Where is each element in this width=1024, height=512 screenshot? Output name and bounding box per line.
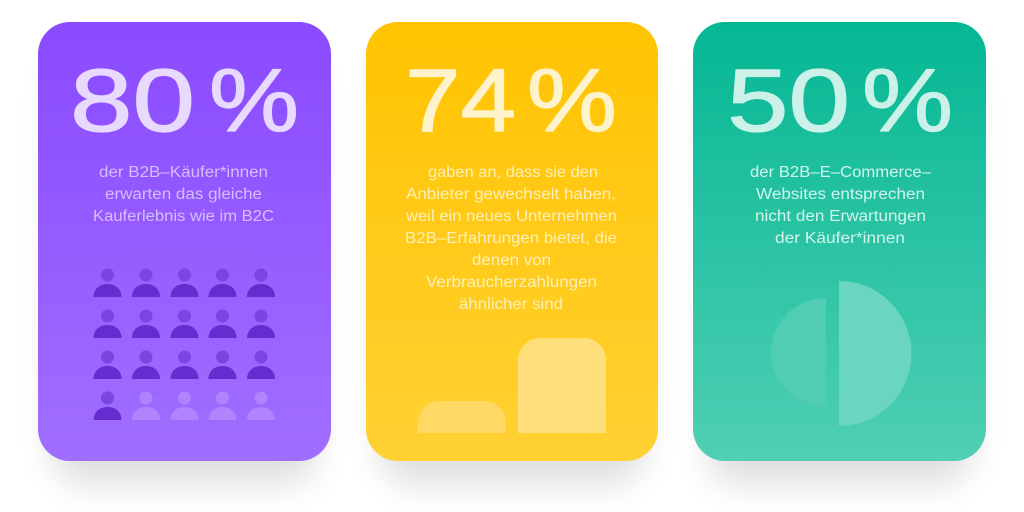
heading: 50 percent [727,50,953,150]
panel: purple card 80 percent [38,22,331,484]
icon grid: people 20 percent light [132,392,275,420]
heading: 50 percent: % [862,50,953,150]
text: yellow description: Verbraucherzahlungen [426,274,597,291]
text: yellow description: gaben an, dass sie den [428,164,598,181]
text: purple description: der B2B–Käufer*innen [99,164,268,181]
text: purple description: erwarten das gleiche [105,186,262,203]
text: green description: der Käufer*innen [775,230,905,247]
heading: 50 percent: 50 [727,50,850,150]
text: green description: Websites entsprechen [756,186,925,203]
heading: 74 percent: 74 [405,50,516,150]
text: green description: der B2B–E–Commerce– [750,164,931,181]
text: yellow description: Anbieter gewechselt haben, [406,186,616,203]
heading: 80 percent: % [209,50,299,150]
bar: small [418,401,506,433]
text: purple description: Kauferlebnis wie im B2C [93,208,274,225]
text: yellow description: weil ein neues Unternehmen [405,208,617,225]
text: yellow description: ähnlicher sind [459,296,563,313]
heading: 80 percent [70,50,299,150]
heading: 80 percent: 80 [70,50,195,150]
heading: 74 percent: % [527,50,617,150]
icon grid: people 80 percent dark [94,268,275,420]
bar chart: two bars [418,338,606,433]
chart: split half circles [771,281,912,426]
text: yellow description: denen von [472,252,551,269]
panel: yellow card 74 percent [366,22,658,484]
text: yellow description [405,164,617,313]
text: green description [750,164,931,247]
text: green description: nicht den Erwartungen [755,208,926,225]
text: purple description [93,164,274,225]
half circle: small left [771,298,826,406]
text: yellow description: B2B–Erfahrungen bietet, die [405,230,617,247]
bar: large [518,338,606,433]
half circle: large right [839,281,912,426]
panel: green card 50 percent [693,22,986,484]
heading: 74 percent [405,50,617,150]
